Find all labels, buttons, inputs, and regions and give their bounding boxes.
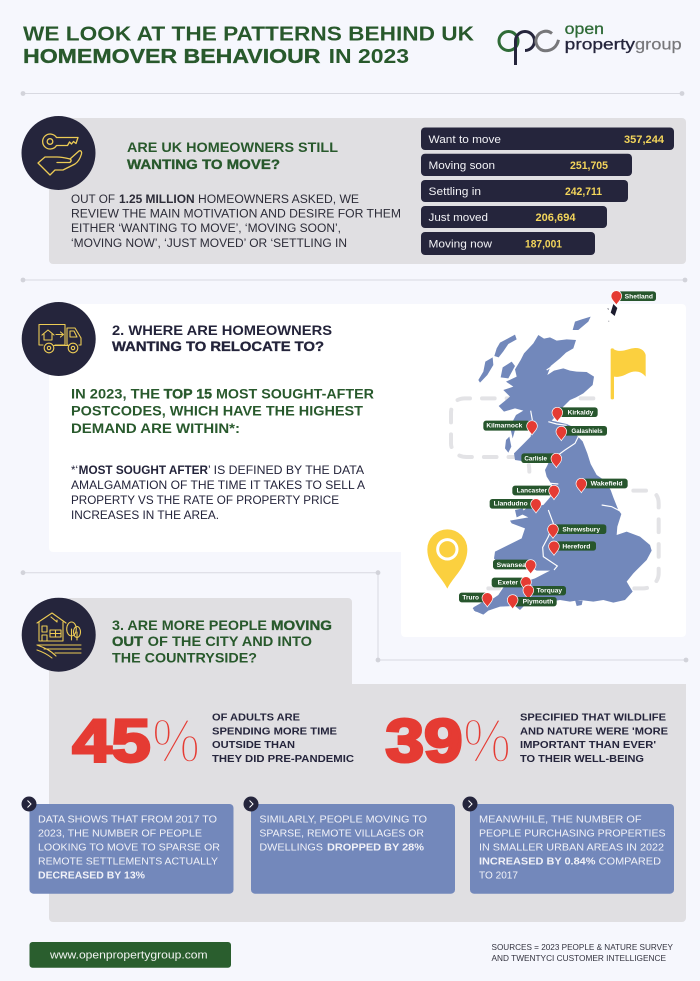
text block: definition: AMALGAMATION OF THE TIME IT TAKES TO SELL A	[71, 479, 365, 492]
map of Great Britain with pins	[427, 291, 659, 615]
heading: OUT	[112, 633, 143, 649]
heading	[112, 322, 332, 354]
pin label: Swansea: Swansea	[497, 562, 526, 569]
card: smaller urban areas increased: INCREASED BY 0.84%	[479, 856, 596, 868]
pin label: Torquay	[523, 585, 566, 599]
pin label: Galashiels	[556, 426, 607, 441]
stat: 39%: 39	[386, 708, 462, 774]
text block: top 15 postcodes: MOST SOUGHT-AFTER	[216, 387, 374, 402]
bar: settling in	[421, 180, 628, 202]
card: sparse settlements decreased: 2023, THE NUMBER OF PEOPLE	[38, 829, 202, 840]
pin label: Shetland	[611, 291, 656, 305]
text block: definition: INCREASES IN THE AREA.	[71, 509, 219, 522]
heading: ARE UK HOMEOWNERS STILL	[127, 139, 338, 155]
card: smaller urban areas increased: IN SMALLER URBAN AREAS IN 2022	[479, 842, 664, 854]
title: WE LOOK AT THE PATTERNS BEHIND UK	[23, 23, 474, 46]
stat: 45%	[72, 707, 354, 776]
bar: want to move: 357,244	[624, 134, 665, 146]
logo: open property group: group	[635, 36, 682, 53]
icon: removal truck	[22, 302, 96, 376]
icon: house and fields	[22, 598, 96, 672]
card: smaller urban areas increased: COMPARED	[599, 856, 661, 868]
logo: open property group: property	[565, 36, 635, 53]
stat: 39%: AND NATURE WERE 'MORE	[520, 726, 668, 738]
icon: yellow flag	[611, 348, 646, 399]
heading: THE COUNTRYSIDE?	[112, 650, 257, 666]
heading	[112, 617, 332, 666]
title: IN 2023	[329, 45, 409, 68]
card: remote villages dropped: SPARSE, REMOTE VILLAGES OR	[259, 829, 424, 840]
pin label: Torquay: Torquay	[537, 588, 562, 595]
logo: open property group: open	[565, 21, 604, 38]
text block: top 15 postcodes: IN 2023, THE	[71, 387, 160, 402]
bar: just moved: 206,694	[536, 212, 576, 224]
pin label: Kirkaldy: Kirkaldy	[568, 409, 594, 416]
card: remote villages dropped: DROPPED BY 28%	[327, 842, 424, 854]
heading: WANTING TO RELOCATE TO?	[112, 338, 324, 354]
pin label: Wakefield	[576, 478, 628, 493]
bar: just moved	[421, 206, 607, 228]
pin label: Hereford: Hereford	[562, 543, 590, 550]
text block: definition: ’ IS DEFINED BY THE DATA	[208, 464, 364, 477]
bar: want to move: Want to move	[428, 134, 501, 146]
bar: moving soon: 251,705	[570, 160, 608, 172]
stat: 45%: SPENDING MORE TIME	[212, 726, 337, 738]
title	[23, 23, 474, 68]
pin label: Truro: Truro	[462, 595, 479, 602]
text block: top 15 postcodes: TOP 15	[164, 387, 213, 402]
pin label: Plymouth: Plymouth	[523, 599, 553, 606]
text block: top 15 postcodes	[71, 387, 374, 436]
pin label: Kilmarnock: Kilmarnock	[486, 423, 523, 430]
text block: ‘MOVING NOW’, ‘JUST MOVED’ OR ‘SETTLING IN	[71, 238, 347, 250]
pin label: Exeter: Exeter	[498, 580, 518, 587]
bar: moving soon	[421, 154, 632, 176]
text block: OUT OF	[71, 194, 115, 206]
pin label: Carlisle	[521, 453, 562, 468]
card: smaller urban areas increased: MEANWHILE, THE NUMBER OF	[479, 815, 642, 826]
footer: sources: SOURCES = 2023 PEOPLE & NATURE SURVEY	[492, 942, 673, 952]
text block: REVIEW THE MAIN MOTIVATION AND DESIRE FOR THEM	[71, 208, 401, 220]
pin label: Shrewsbury	[548, 524, 606, 538]
stat: 45%: 45	[72, 708, 150, 774]
pin label: Llandudno	[490, 499, 541, 513]
stat: 39%	[386, 707, 668, 776]
text block: definition	[71, 464, 365, 522]
pin label: Llandudno: Llandudno	[494, 501, 528, 508]
pin label: Exeter	[492, 577, 531, 591]
bar: moving now: 187,001	[525, 238, 562, 250]
stat: 39%: SPECIFIED THAT WILDLIFE	[520, 712, 666, 724]
footer: sources: AND TWENTYCI CUSTOMER INTELLIGENCE	[492, 953, 666, 963]
title: HOMEMOVER BEHAVIOUR	[23, 45, 321, 68]
stat: 45%: %	[152, 707, 200, 776]
panel: moving out of the city	[22, 598, 686, 922]
text block: definition: PROPERTY VS THE RATE OF PROPERTY PRICE	[71, 494, 339, 507]
card: smaller urban areas increased	[462, 796, 674, 894]
pin label: Kirkaldy	[552, 407, 598, 422]
footer: website button: www.openpropertygroup.com	[49, 950, 208, 962]
card: smaller urban areas increased: PEOPLE PURCHASING PROPERTIES	[479, 829, 666, 840]
pin label: Hereford	[549, 541, 596, 555]
bar: moving now	[421, 232, 595, 255]
card: sparse settlements decreased: DATA SHOWS THAT FROM 2017 TO	[38, 815, 217, 826]
card: remote villages dropped: DWELLINGS	[259, 842, 323, 854]
text block: top 15 postcodes: DEMAND ARE WITHIN*:	[71, 421, 240, 436]
pin label: Shrewsbury: Shrewsbury	[562, 526, 600, 533]
icon: key and hand	[22, 116, 96, 190]
panel: where are homeowners wanting to relocate	[22, 291, 686, 637]
text block: definition: MOST SOUGHT AFTER	[79, 464, 209, 477]
stat: 39%: IMPORTANT THAN EVER'	[520, 739, 656, 751]
map: mainland Britain	[473, 304, 652, 615]
heading: WANTING TO MOVE?	[127, 156, 280, 172]
stat: 39%: TO THEIR WELL-BEING	[520, 753, 644, 765]
text block	[71, 194, 401, 250]
heading: OF THE CITY AND INTO	[148, 633, 312, 649]
pin label: Wakefield: Wakefield	[591, 481, 623, 488]
bar: moving now: Moving now	[428, 238, 492, 250]
pin label: Shetland: Shetland	[625, 294, 653, 301]
bar: settling in: 242,711	[565, 186, 602, 198]
card: remote villages dropped: SIMILARLY, PEOPLE MOVING TO	[259, 815, 427, 826]
panel: are UK homeowners still wanting to move	[22, 116, 686, 264]
text block: EITHER ‘WANTING TO MOVE’, ‘MOVING SOON’,	[71, 223, 341, 235]
text block: 1.25 MILLION	[119, 194, 195, 206]
heading	[127, 139, 338, 172]
pin label: Carlisle: Carlisle	[524, 455, 547, 462]
card: sparse settlements decreased	[22, 796, 234, 894]
bar: moving soon: Moving soon	[428, 160, 495, 172]
heading: MOVING	[271, 617, 332, 633]
footer: website button	[30, 942, 231, 968]
stat: 45%: OUTSIDE THAN	[212, 739, 295, 751]
stat: 45%: OF ADULTS ARE	[212, 712, 300, 724]
logo: open property group	[499, 21, 682, 65]
card: sparse settlements decreased: DECREASED BY 13%	[38, 870, 145, 881]
bar: want to move	[421, 128, 674, 150]
pin label: Kilmarnock	[483, 421, 537, 435]
stat: 45%: THEY DID PRE-PANDEMIC	[212, 753, 354, 765]
footer: sources	[492, 942, 673, 963]
stat: 39%: %	[463, 707, 511, 776]
bar: settling in: Settling in	[428, 186, 481, 198]
pin label: Swansea	[493, 560, 536, 574]
text block: top 15 postcodes: POSTCODES, WHICH HAVE THE HIGHEST	[71, 404, 364, 419]
bar: just moved: Just moved	[428, 212, 488, 224]
icon: yellow location marker	[427, 529, 467, 589]
bar chart: homeowner motivation	[421, 128, 674, 255]
card: smaller urban areas increased: TO 2017	[479, 870, 518, 881]
card: sparse settlements decreased: REMOTE SETTLEMENTS ACTUALLY	[38, 856, 218, 868]
card: sparse settlements decreased: LOOKING TO MOVE TO SPARSE OR	[38, 842, 220, 854]
pin label: Truro	[459, 593, 493, 607]
card: remote villages dropped	[244, 796, 455, 894]
heading: 3. ARE MORE PEOPLE	[112, 617, 267, 633]
text block: HOMEOWNERS ASKED, WE	[198, 194, 359, 206]
pin label: Galashiels: Galashiels	[571, 428, 603, 435]
text block: definition: *‘	[71, 464, 78, 477]
pin label: Lancaster: Lancaster	[517, 488, 547, 495]
pin label: Lancaster	[512, 485, 559, 500]
heading: 2. WHERE ARE HOMEOWNERS	[112, 322, 332, 338]
pin label: Plymouth	[507, 595, 557, 609]
